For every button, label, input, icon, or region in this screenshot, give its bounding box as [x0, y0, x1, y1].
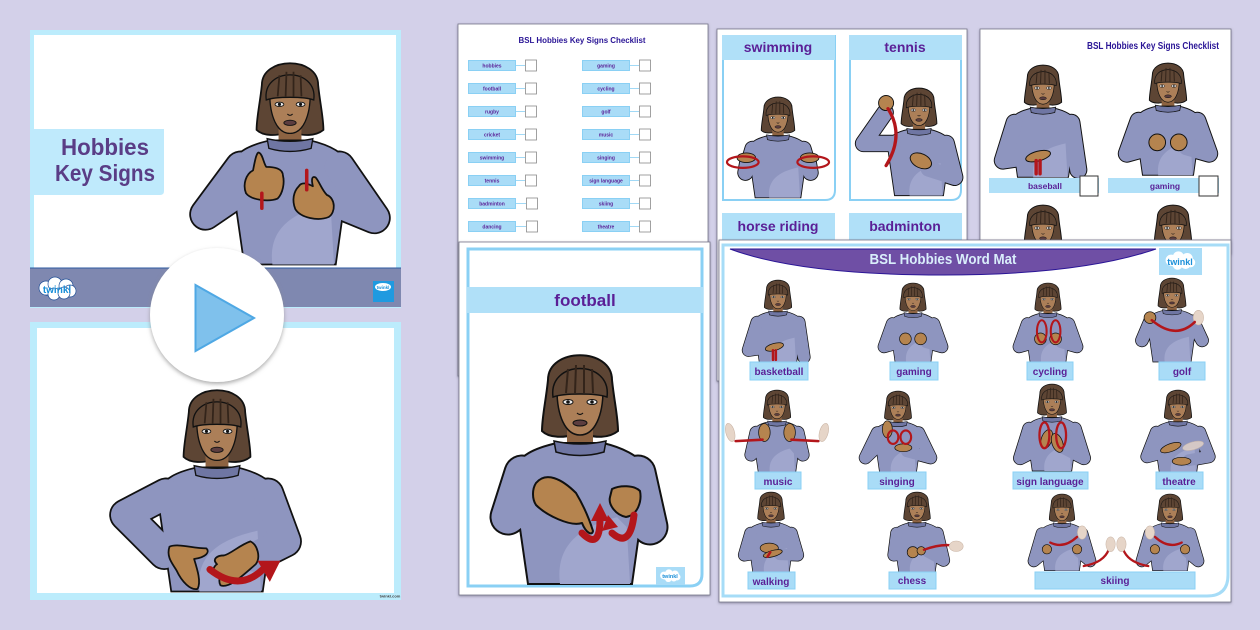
row cycling: cycling [597, 86, 615, 92]
figure: music [724, 390, 830, 472]
title tab: Hobbies [61, 134, 149, 160]
row rugby [468, 106, 536, 117]
figure: golf [1142, 278, 1204, 362]
title tab [30, 129, 164, 195]
figure: swimming sign [727, 97, 829, 198]
figure: skiing right [1117, 494, 1198, 571]
row singing [582, 152, 650, 163]
row cricket: cricket [484, 132, 500, 138]
label: horse riding [722, 213, 835, 243]
footer bar [30, 268, 401, 307]
logo tile: twinkl [662, 574, 678, 580]
row dancing: dancing [482, 224, 502, 230]
label: cycling [1027, 362, 1073, 380]
slide: stomach sign [30, 322, 401, 600]
label: singing: singing [879, 477, 915, 488]
checklist title: BSL Hobbies Key Signs Checklist [518, 36, 646, 45]
figure: walking [744, 492, 798, 572]
row sign language [582, 175, 650, 186]
label: golf [1159, 362, 1205, 380]
figure: partial lower left [1010, 205, 1076, 317]
row singing: singing [597, 156, 615, 162]
figure: baseball sign [1003, 65, 1078, 177]
label: cycling: cycling [1033, 367, 1067, 378]
label: baseball: baseball [1028, 181, 1062, 191]
figure: singing [865, 391, 931, 472]
row swimming: swimming [480, 156, 504, 162]
label: badminton: badminton [869, 218, 941, 234]
label: walking [748, 572, 795, 589]
figure: sign language [1020, 384, 1084, 471]
checklist heading: BSL Hobbies Key Signs Checklist [1087, 41, 1220, 52]
row cycling [582, 83, 650, 94]
label: music: music [764, 477, 793, 488]
label: walking: walking [752, 577, 789, 588]
row rugby: rugby [485, 110, 499, 116]
row theatre: theatre [598, 224, 615, 230]
label: horse riding: horse riding [738, 218, 818, 234]
row sign language: sign language [589, 178, 623, 184]
label: theatre [1156, 472, 1203, 489]
figure: theatre [1147, 390, 1209, 472]
label: gaming: gaming [1150, 181, 1180, 191]
figure: hands at waist [125, 390, 286, 592]
figure: cycling [1019, 283, 1077, 362]
footer credit: twinkl.com [380, 594, 401, 598]
figure: gaming [884, 283, 942, 362]
row hobbies [468, 60, 536, 71]
figure: basketball [748, 280, 804, 362]
title tab: Key Signs [55, 160, 155, 186]
banner: BSL Hobbies Word Mat [870, 252, 1017, 268]
row music: music [599, 132, 613, 138]
row music [582, 129, 650, 140]
logo tile [656, 567, 685, 585]
label: skiing [1035, 572, 1195, 589]
row skiing: skiing [599, 202, 613, 208]
figure: sign for thumbs moving [206, 63, 374, 265]
row football: football [483, 86, 502, 92]
row skiing [582, 198, 650, 209]
card: tennis [849, 35, 962, 200]
header: football [467, 287, 703, 313]
figure: partial lower right [1140, 205, 1206, 317]
label: sign language [1013, 472, 1088, 489]
figure: tennis sign [864, 88, 955, 196]
label: badminton [849, 213, 962, 243]
label: skiing: skiing [1101, 576, 1129, 587]
label: chess [889, 572, 936, 589]
header: football: football [554, 291, 616, 310]
banner [730, 249, 1156, 275]
label: gaming [890, 362, 938, 380]
card: swimming [722, 35, 835, 200]
paper: BSL hobbies checklist [458, 24, 708, 376]
label: basketball [750, 362, 808, 380]
logo: twinkl [39, 277, 76, 300]
badge: twinkl [377, 285, 389, 290]
row dancing [468, 221, 538, 232]
row gaming: gaming [597, 64, 615, 70]
label: baseball [989, 176, 1099, 196]
row swimming [468, 152, 536, 163]
figure: gaming sign [1127, 63, 1209, 175]
figure: skiing left [1034, 494, 1115, 571]
row theatre [582, 221, 650, 232]
row cricket [468, 129, 536, 140]
paper: flashcards [717, 29, 967, 381]
label: theatre: theatre [1162, 477, 1196, 488]
paper: football card [459, 242, 710, 595]
row golf: golf [601, 110, 611, 116]
logo: twinkl: twinkl [43, 285, 71, 296]
card: swimming: swimming [744, 39, 812, 55]
paper: word mat [719, 240, 1231, 602]
figure: football sign [508, 355, 650, 584]
logo tile: twinkl [1167, 257, 1193, 267]
logo tile [1159, 248, 1202, 275]
label: basketball: basketball [755, 367, 804, 378]
row gaming [582, 60, 650, 71]
row tennis [468, 175, 536, 186]
label: golf: golf [1173, 367, 1192, 378]
row tennis: tennis [485, 178, 500, 184]
slide: hobbies title slide [30, 30, 401, 308]
label: singing [868, 472, 926, 489]
row football [468, 83, 536, 94]
label: sign language: sign language [1016, 477, 1084, 488]
label: chess: chess [898, 576, 927, 587]
label: music [755, 472, 801, 489]
row badminton [468, 198, 538, 209]
card: tennis: tennis [884, 39, 926, 55]
label: gaming [1108, 176, 1219, 196]
play button [150, 248, 284, 382]
label: gaming: gaming [896, 367, 932, 378]
row hobbies: hobbies [482, 64, 502, 70]
row golf [582, 106, 650, 117]
paper: checklist with figures [980, 29, 1231, 317]
figure: chess [893, 492, 963, 572]
row badminton: badminton [479, 202, 505, 208]
badge [373, 281, 394, 302]
